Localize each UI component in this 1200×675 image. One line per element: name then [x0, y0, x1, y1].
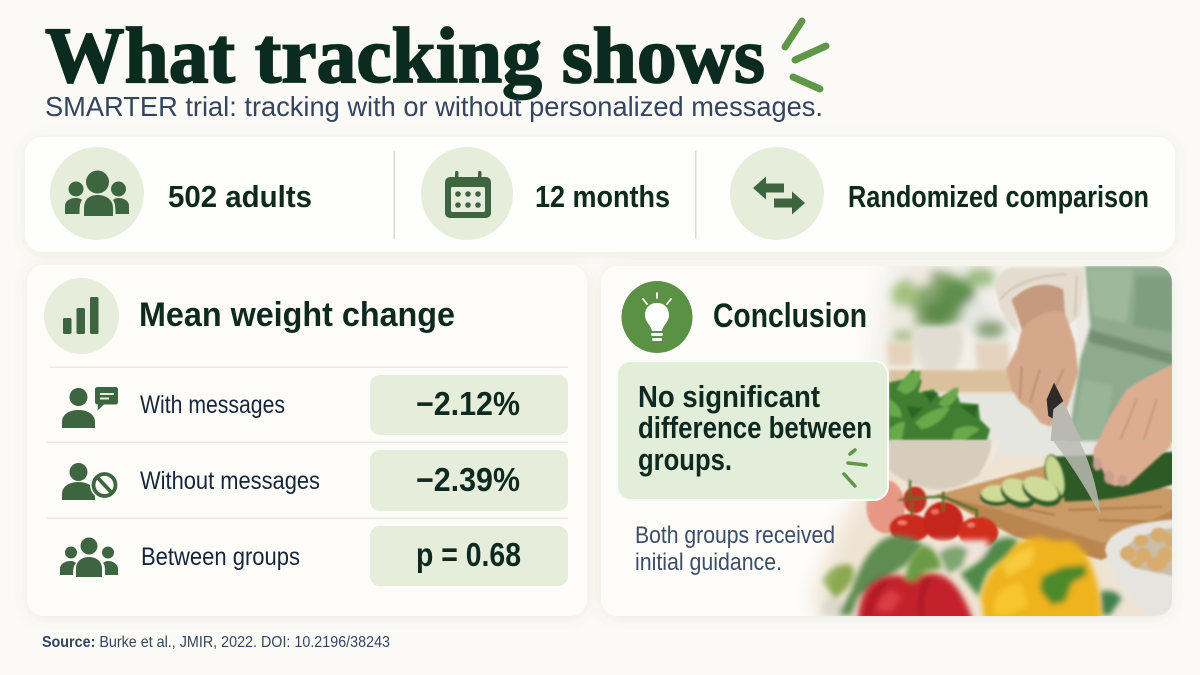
- icon: bar chart: [44, 278, 119, 354]
- salad leaves: [889, 369, 990, 441]
- row: without messages: Without messages: [140, 467, 320, 495]
- row: with messages: With messages: [140, 391, 285, 419]
- board: [935, 466, 1177, 560]
- lower blade: [1052, 440, 1100, 515]
- fact: randomized comparison: [730, 147, 1149, 240]
- knife handle and upper blade: [1047, 383, 1063, 421]
- icon: title sparks: [785, 21, 826, 89]
- wooden shelf: [888, 370, 1017, 393]
- red pepper: [857, 573, 975, 627]
- callout: no significant difference: difference between: [638, 410, 872, 445]
- fingers: [1093, 440, 1172, 487]
- apron: [1068, 266, 1173, 441]
- row: without messages: [62, 450, 568, 511]
- fact: 12 months: 12 months: [535, 179, 670, 214]
- callout: no significant difference: groups.: [638, 442, 732, 477]
- cutting arm and hand: [1006, 284, 1078, 427]
- fact: 12 months: [421, 147, 670, 240]
- callout: no significant difference: [617, 361, 888, 500]
- fact: 502 adults: 502 adults: [168, 179, 312, 214]
- photo: kitchen vegetables being chopped: [790, 266, 1180, 627]
- salad bowl: [889, 440, 1000, 489]
- panel: mean weight change: [27, 265, 587, 616]
- chickpea bowl: [1105, 519, 1177, 615]
- panel: conclusion: [601, 266, 1180, 627]
- text: both groups received guidance: [635, 522, 835, 576]
- title: What tracking shows: [45, 13, 765, 100]
- icon: lightbulb: [622, 281, 692, 353]
- tomatoes: [866, 480, 998, 548]
- panel: study facts: [25, 137, 1175, 252]
- icon: callout sparks: [844, 450, 866, 486]
- sleeve: [995, 268, 1085, 333]
- lower photo: bowl, board, cucumber, tomatoes, peppers: [820, 440, 1177, 627]
- upper photo: plants, arms, apron: [887, 266, 1173, 441]
- foreground greens and peppers: [820, 535, 1122, 615]
- text: both groups received guidance: Both groups received: [635, 522, 835, 549]
- heading: mean weight change: Mean weight change: [139, 296, 455, 334]
- row: between groups: [60, 526, 568, 586]
- row: between groups: Between groups: [141, 543, 300, 571]
- row: without messages: −2.39%: [416, 461, 520, 498]
- heading: conclusion: Conclusion: [713, 297, 867, 335]
- subtitle: SMARTER trial: tracking with or without personalized messages.: [45, 91, 823, 122]
- fact: 502 adults: [50, 147, 312, 240]
- row: with messages: −2.12%: [416, 385, 520, 422]
- wall and counter: [872, 266, 1087, 393]
- row: with messages: [62, 375, 568, 435]
- row: between groups: p = 0.68: [416, 536, 521, 573]
- yellow pepper: [981, 537, 1102, 627]
- supporting hand: [1098, 364, 1173, 441]
- source note: Source: Burke et al., JMIR, 2022. DOI: 10.2196/38243: [42, 634, 390, 651]
- callout: no significant difference: No significant: [638, 379, 820, 414]
- blurred plants and pots: [888, 268, 1005, 343]
- text: both groups received guidance: initial guidance.: [635, 549, 782, 576]
- cucumber: [980, 452, 1177, 513]
